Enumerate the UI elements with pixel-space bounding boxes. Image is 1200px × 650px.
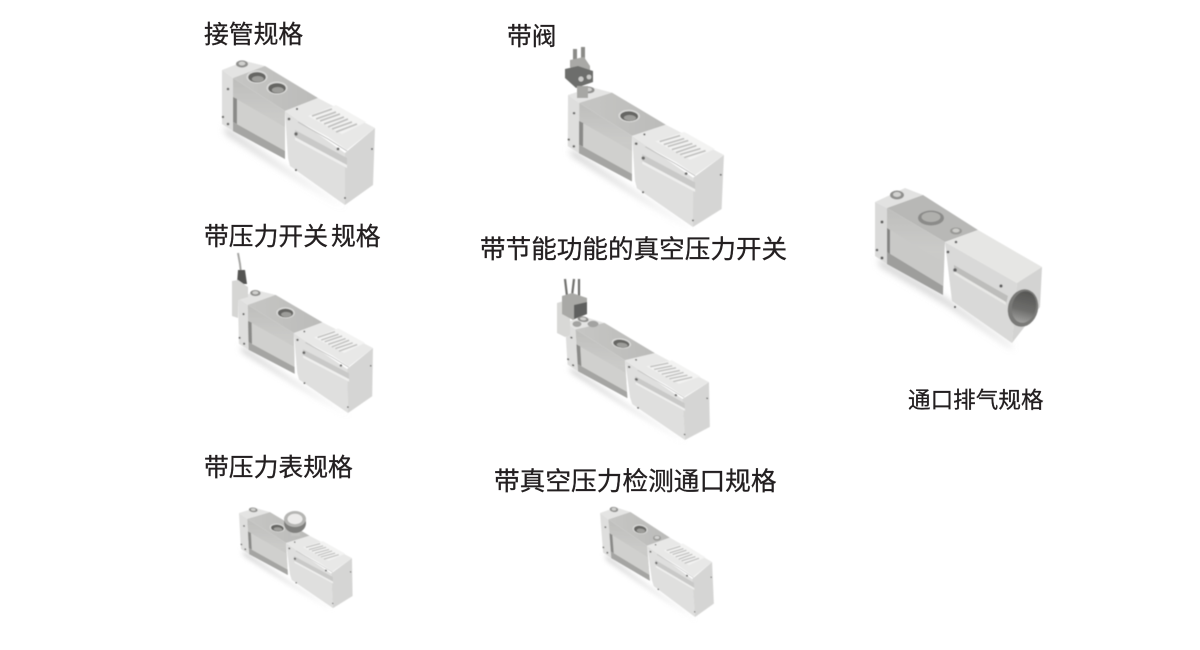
heading: 带节能功能的真空压力开关: 带节能功能的真空压力开关 [480,235,787,264]
icon: valve block on top [565,47,593,98]
device: piping specification [222,60,375,211]
device: with valve [565,47,724,234]
heading: 带真空压力检测通口规格: 带真空压力检测通口规格 [494,467,777,496]
device: with pressure switch [232,253,374,418]
icon: switch, valve and cables [557,279,598,337]
icon: exhaust opening [1004,286,1042,330]
heading: 通口排气规格: 通口排气规格 [908,388,1044,413]
icon: top fitting [890,190,904,200]
device: port exhaust [875,188,1042,349]
device: with vacuum pressure detection port [599,506,717,623]
device: with pressure gauge [238,507,355,613]
heading: 带压力表规格: 带压力表规格 [204,454,353,482]
icon: small plug [653,535,661,541]
icon: two top ports [246,70,288,94]
heading: 带压力开关 规格: 规格 [331,223,381,251]
heading: 带阀: 带阀 [507,23,557,51]
heading: 带压力开关 规格: 带压力开关 [204,224,328,251]
icon: pressure switch and cable [232,253,248,318]
icon: top port and plug [918,210,962,234]
heading: 接管规格: 接管规格 [204,21,303,49]
device: with energy saving vacuum pressure switch [557,279,713,448]
icon: pressure gauge [284,511,306,536]
